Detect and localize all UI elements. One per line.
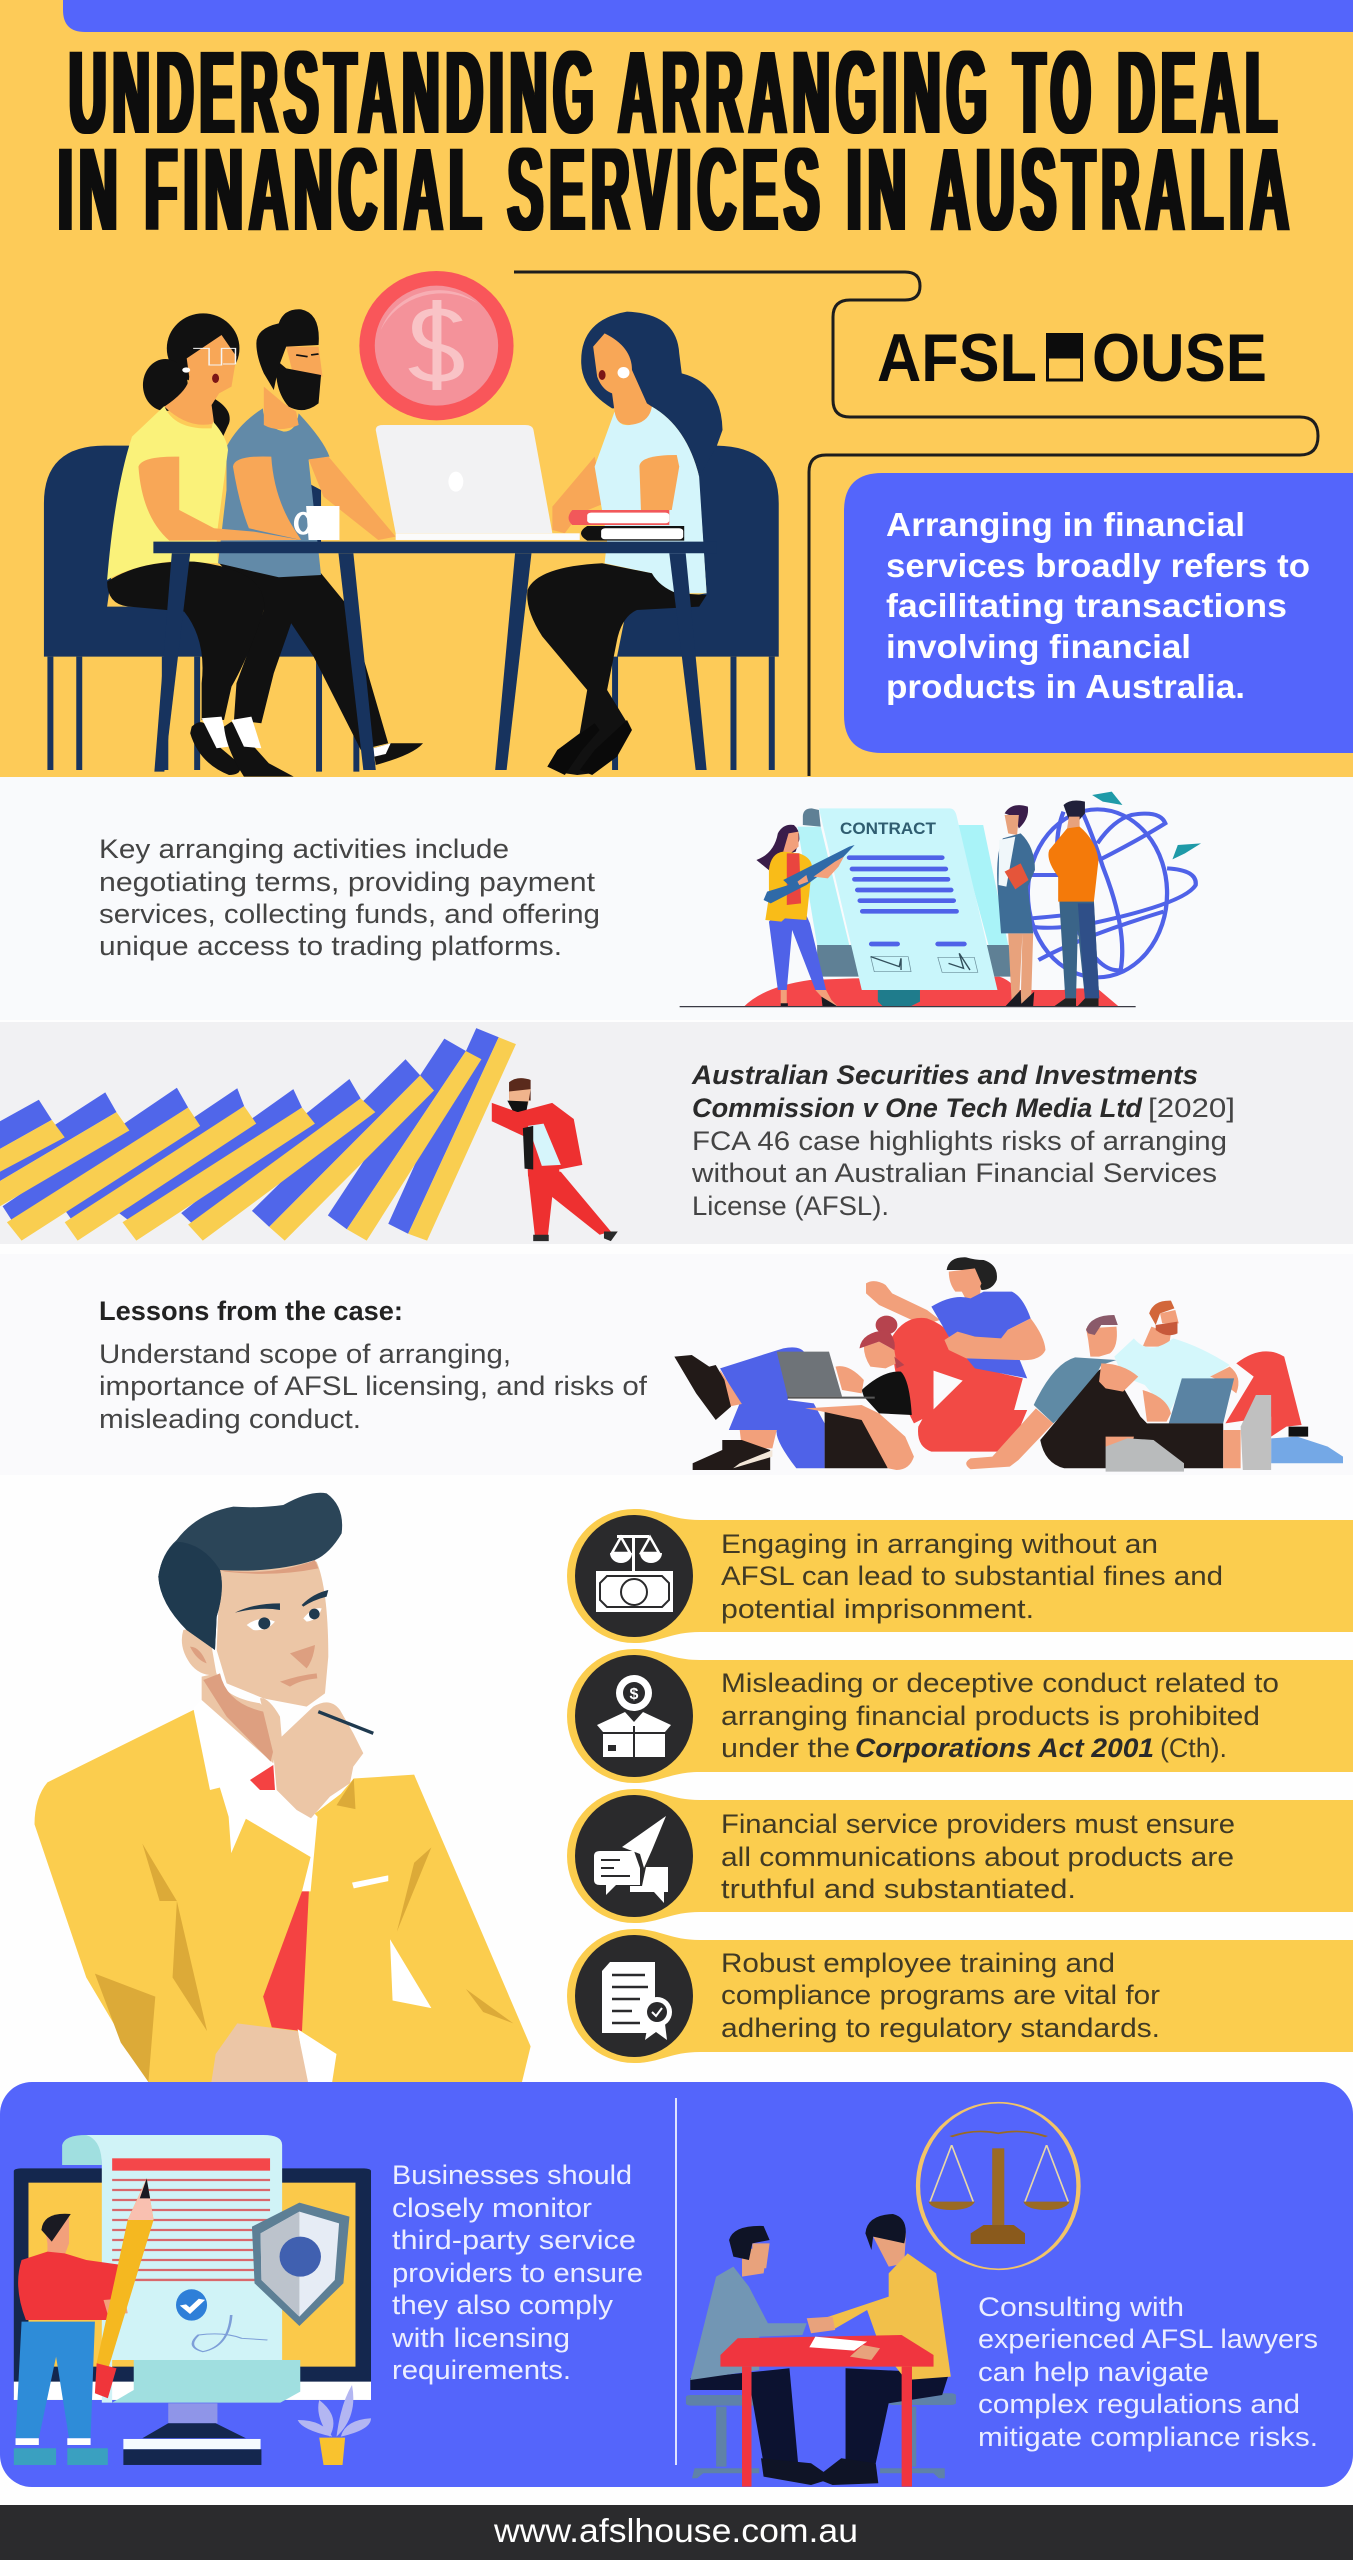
icons: paper planes	[1092, 792, 1201, 859]
item: training: compliance programs are vital for	[721, 1980, 1160, 2010]
label: CONTRACT: CONTRACT	[840, 819, 937, 838]
text: case summary	[691, 1060, 1235, 1221]
text: lessons: misleading conduct.	[99, 1404, 361, 1434]
text: consult lawyers: experienced AFSL lawyers	[978, 2324, 1318, 2354]
icon: scales and banknote	[596, 1535, 673, 1612]
callout: definition: involving financial	[886, 628, 1191, 665]
icon: checklist certificate	[602, 1962, 672, 2040]
top blue bar	[63, 0, 1353, 32]
person: man in red suit	[492, 1078, 618, 1241]
item: fines: AFSL can lead to substantial fines and	[721, 1561, 1223, 1591]
monitor	[14, 2168, 371, 2465]
text: key activities	[99, 834, 600, 961]
text: monitor third parties: providers to ensure	[392, 2258, 643, 2288]
illustration: people with laptops	[674, 1257, 1343, 1472]
chairs	[686, 2393, 956, 2478]
person: woman with glasses	[107, 313, 301, 777]
callout: definition: Arranging in financial	[886, 506, 1245, 543]
icon: scales of justice	[918, 2103, 1078, 2269]
illustration: thinking man in yellow suit	[35, 1493, 531, 2082]
panel: key activities	[0, 777, 1353, 1020]
stack of books	[569, 510, 684, 541]
text: lessons: Lessons from the case:	[99, 1296, 403, 1326]
text: case summary: Australian Securities and Investments	[691, 1060, 1198, 1090]
logo: OUSE	[1092, 320, 1267, 396]
contract document	[803, 808, 997, 990]
item: training: adhering to regulatory standards.	[721, 2013, 1160, 2043]
callout: definition: products in Australia.	[886, 668, 1245, 705]
text: consult lawyers	[978, 2292, 1318, 2452]
text: case summary: without an Australian Financial Services	[691, 1158, 1217, 1188]
text: consult lawyers: mitigate compliance risks.	[978, 2422, 1318, 2452]
text: consult lawyers: Consulting with	[978, 2292, 1184, 2322]
text: case summary: FCA 46 case highlights risks of arranging	[692, 1126, 1227, 1156]
list: compliance points	[567, 1509, 1353, 2063]
person: woman with pen	[756, 825, 855, 1007]
text: monitor third parties: third-party service	[392, 2225, 636, 2255]
person: man with pencil	[14, 2214, 134, 2465]
text: key activities: negotiating terms, providing payment	[99, 867, 596, 897]
item: truthful communications: truthful and substantiated.	[721, 1874, 1076, 1904]
item: misleading conduct: (Cth).	[1160, 1733, 1227, 1763]
item: truthful communications: all communications about products are	[721, 1842, 1234, 1872]
person: man in grey-blue shirt	[1034, 1315, 1118, 1423]
item: misleading conduct: Misleading or deceptive conduct related to	[721, 1668, 1279, 1698]
text: monitor third parties: they also comply	[392, 2290, 614, 2320]
callout: definition: facilitating transactions	[886, 587, 1287, 624]
item: misleading conduct: under the	[721, 1733, 850, 1763]
text: lessons: importance of AFSL licensing, and risks of	[99, 1371, 648, 1401]
text: case summary: [2020]	[1148, 1093, 1235, 1123]
icon: dollar coin	[359, 271, 514, 420]
item: misleading conduct	[567, 1649, 1353, 1783]
person: woman with laptop	[674, 1316, 914, 1470]
person: woman with folder	[997, 805, 1035, 1006]
text: case summary: Commission v One Tech Media Ltd	[692, 1093, 1143, 1123]
person: woman with navy hair	[527, 312, 723, 775]
icon: coffee cup	[296, 506, 339, 540]
item: fines: Engaging in arranging without an	[721, 1529, 1158, 1559]
laptop	[376, 425, 580, 540]
text: lessons: Understand scope of arranging,	[99, 1339, 511, 1369]
panel: court case	[0, 1022, 1353, 1244]
pencil	[95, 2178, 154, 2398]
panel: lessons	[0, 1254, 1353, 1475]
icon: paper plane and chat	[594, 1816, 668, 1903]
dominoes	[0, 1028, 516, 1241]
logo: AFSL	[877, 320, 1037, 396]
person: man with beard	[1114, 1301, 1343, 1463]
person: bearded man	[218, 309, 423, 765]
footer: website	[0, 2505, 1353, 2560]
panel: hero	[0, 0, 1353, 777]
text: monitor third parties: closely monitor	[392, 2193, 592, 2223]
text: case summary: License (AFSL).	[692, 1191, 889, 1221]
title	[58, 27, 1295, 256]
illustration: three people at a table	[44, 271, 779, 777]
table	[153, 542, 717, 772]
icon: gear and box: $	[630, 1686, 639, 1703]
document with signature	[62, 2135, 300, 2403]
item: truthful communications: Financial service providers must ensure	[721, 1809, 1235, 1839]
callout: definition: services broadly refers to	[886, 547, 1310, 584]
seated man legs and shoes	[966, 1363, 1271, 1472]
text: monitor third parties	[391, 2160, 643, 2385]
chairs	[44, 446, 779, 772]
person: woman in blue shirt	[866, 1257, 1045, 1452]
person: man in orange	[1048, 801, 1099, 1006]
globe	[1028, 809, 1196, 977]
icon: gear and box	[597, 1675, 671, 1757]
text: consult lawyers: complex regulations and	[978, 2389, 1300, 2419]
item: training	[567, 1929, 1353, 2063]
panel: recommendations	[0, 2082, 1353, 2487]
text: lessons	[99, 1296, 648, 1434]
text: consult lawyers: can help navigate	[978, 2357, 1209, 2387]
item: fines: potential imprisonment.	[721, 1594, 1034, 1624]
table with paper	[720, 2335, 934, 2487]
footer: website: www.afslhouse.com.au	[493, 2512, 858, 2549]
illustration: scales and two men shaking hands	[686, 2103, 1078, 2487]
callout: definition	[844, 473, 1353, 753]
item: misleading conduct: Corporations Act 2001	[855, 1733, 1154, 1763]
text: key activities: services, collecting funds, and offering	[99, 899, 600, 929]
icon: potted plant	[298, 2385, 371, 2465]
illustration: monitor, document and man with pencil	[14, 2135, 371, 2465]
connector line	[514, 272, 1318, 776]
person: man in grey jacket	[690, 2226, 833, 2485]
item: misleading conduct: arranging financial products is prohibited	[721, 1701, 1260, 1731]
head and hand	[158, 1493, 373, 1818]
text: monitor third parties: requirements.	[392, 2355, 571, 2385]
jacket and shirt	[35, 1710, 531, 2082]
item: fines	[567, 1509, 1353, 1643]
logo	[877, 320, 1267, 396]
item: truthful communications	[567, 1789, 1353, 1923]
item: training: Robust employee training and	[721, 1948, 1115, 1978]
illustration: contract and people	[680, 792, 1201, 1007]
shield	[252, 2203, 349, 2326]
text: monitor third parties: with licensing	[391, 2323, 570, 2353]
illustration: falling dominoes and man	[0, 1028, 618, 1241]
text: monitor third parties: Businesses should	[392, 2160, 632, 2190]
text: key activities: unique access to trading platforms.	[99, 931, 562, 961]
text: key activities: Key arranging activities include	[99, 834, 509, 864]
person: man in yellow jacket	[807, 2214, 951, 2485]
